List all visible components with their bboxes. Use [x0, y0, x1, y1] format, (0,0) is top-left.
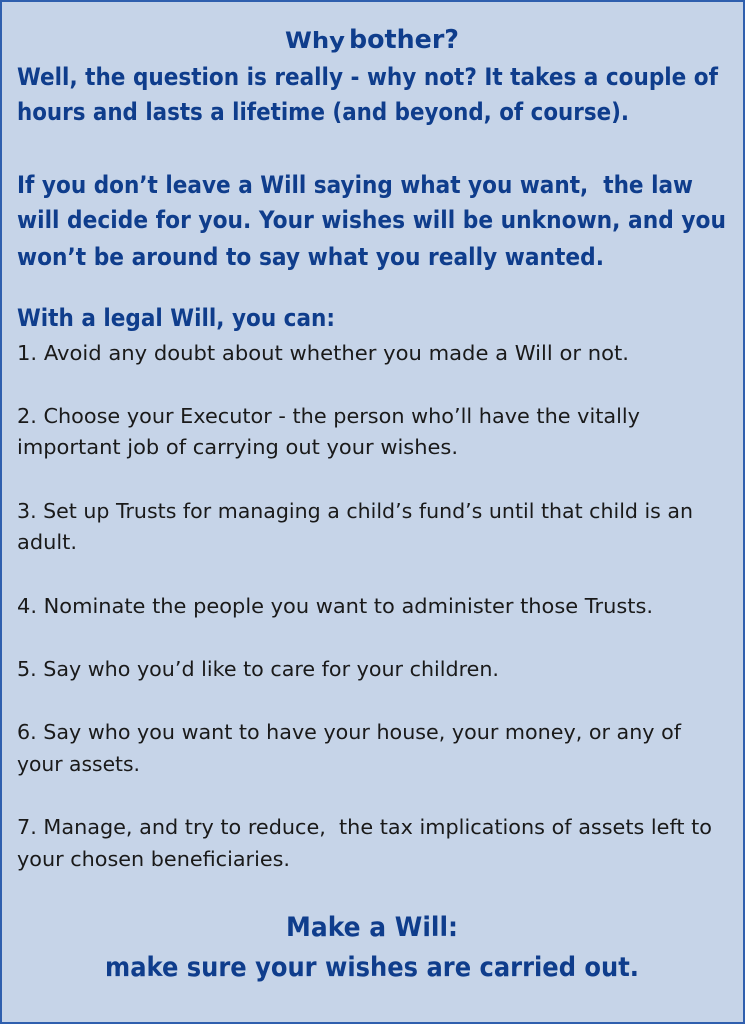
call to action: make sure your wishes are carried out.	[105, 952, 639, 983]
list item 2: important job of carrying out your wishes.	[17, 435, 458, 459]
list of seven benefits	[17, 341, 712, 871]
call to action: Make a Will:	[286, 912, 458, 943]
list item 5: 5. Say who you’d like to care for your children.	[17, 657, 499, 681]
text block: the law will decide	[17, 171, 726, 271]
list item 2: 2. Choose your Executor - the person who’ll have the vitally	[17, 404, 640, 428]
list item 7: 7. Manage, and try to reduce, the tax implications of assets left to	[17, 815, 712, 839]
list item 7	[17, 815, 712, 871]
heading: why bother: bother?	[349, 25, 459, 55]
heading: why bother: Why	[285, 29, 345, 54]
list item 1: 1. Avoid any doubt about whether you made a Will or not.	[17, 341, 629, 365]
text block: why not	[17, 63, 718, 126]
list item 3	[17, 499, 693, 554]
list item 7: your chosen beneficiaries.	[17, 847, 290, 871]
list item 2	[17, 404, 640, 459]
subheading: with a legal will: With a legal Will, you can:	[17, 304, 335, 332]
call to action	[105, 912, 639, 983]
list item 6	[17, 720, 682, 776]
list item 3: adult.	[17, 530, 77, 554]
list item 3: 3. Set up Trusts for managing a child’s fund’s until that child is an	[17, 499, 693, 523]
list item 6: your assets.	[17, 752, 140, 776]
list item 4: 4. Nominate the people you want to administer those Trusts.	[17, 594, 653, 618]
text block: why not: hours and lasts a lifetime (and beyond, of course).	[17, 98, 629, 126]
heading: why bother	[285, 25, 459, 55]
list item 6: 6. Say who you want to have your house, your money, or any of	[17, 720, 682, 744]
text block: the law will decide: won’t be around to say what you really wanted.	[17, 243, 604, 271]
